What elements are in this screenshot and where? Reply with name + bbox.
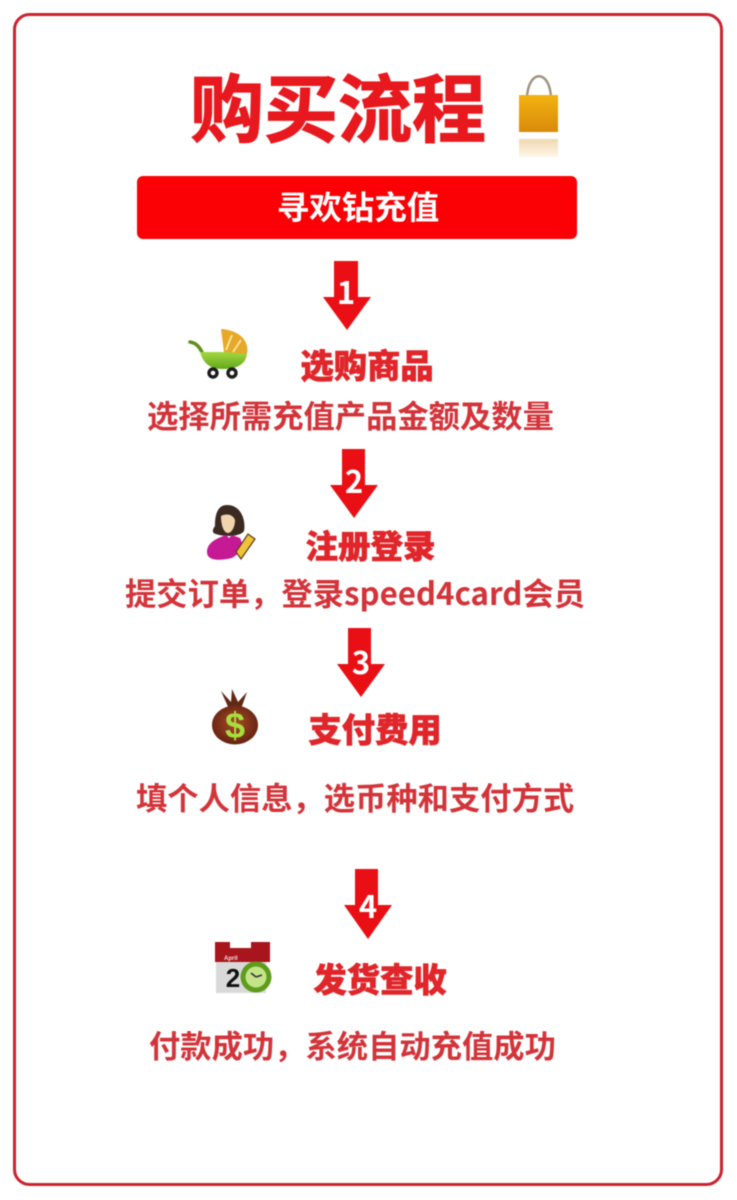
- arrow 3: [337, 628, 385, 697]
- description: step 2: 提交订单，登录speed4card会员: [125, 570, 585, 615]
- banner: 寻欢钻充值: 寻欢钻充值: [277, 182, 439, 229]
- icon: calendar with clock: [215, 942, 272, 993]
- icon: money bag: [212, 689, 258, 746]
- heading: 支付费用: 支付费用: [308, 703, 442, 752]
- arrow 2: [330, 449, 378, 518]
- arrow 2: 2: [345, 457, 363, 502]
- arrow 3: 3: [352, 638, 370, 683]
- arrow 1: [323, 261, 371, 330]
- heading: 选购商品: 选购商品: [300, 339, 434, 388]
- banner: 寻欢钻充值: [137, 176, 577, 239]
- arrow 4: [344, 869, 392, 939]
- arrow 4: 4: [359, 882, 377, 927]
- title: 购买流程: [190, 51, 486, 158]
- icon: calendar with clock: April: [224, 956, 238, 962]
- description: step 4: 付款成功，系统自动充值成功: [149, 1022, 556, 1068]
- heading: 注册登录: 注册登录: [306, 521, 436, 568]
- heading: 发货查收: 发货查收: [314, 953, 447, 1002]
- description: step 3: 填个人信息，选币种和支付方式: [136, 774, 574, 820]
- icon: shopping bag: [519, 76, 558, 157]
- icon: woman with pencil: [207, 505, 255, 560]
- description: step 1: 选择所需充值产品金额及数量: [147, 392, 554, 438]
- icon: green stroller: [190, 329, 247, 377]
- icon: calendar with clock: 2: [226, 963, 240, 993]
- arrow 1: 1: [337, 268, 355, 313]
- icon: money bag: $: [225, 705, 245, 746]
